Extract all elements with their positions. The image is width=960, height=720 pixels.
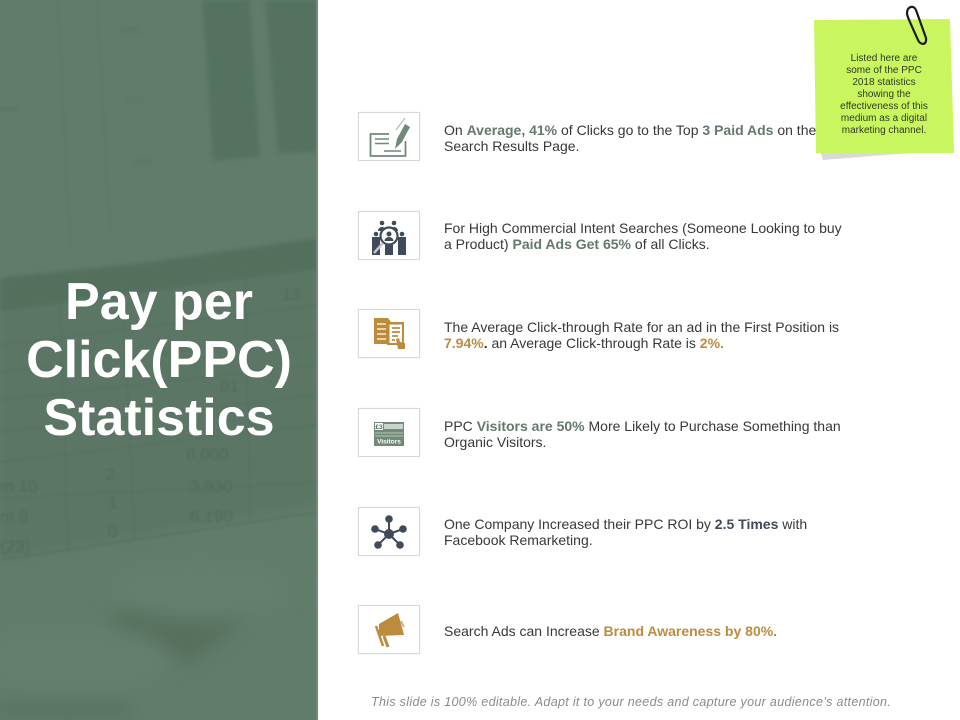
panel: photo background: [0, 0, 318, 720]
panel: photo background: 13: [282, 285, 301, 304]
title: Statistics: [43, 389, 275, 447]
text: facebook remarketing: [444, 516, 807, 548]
icon: check and pen: [358, 112, 420, 161]
note paper: [814, 19, 954, 153]
icon: visitors card: £3: [375, 424, 383, 431]
text: brand awareness: Search Ads can Increase Brand Awareness by 80%.: [444, 623, 777, 639]
text: click-through rate: [444, 319, 839, 351]
text: visitors likely to purchase: PPC Visitors are 50% More Likely to Purchase Something than: [444, 418, 841, 434]
text: clicks on top ads: On Average, 41% of Clicks go to the Top 3 Paid Ads on the: [444, 122, 816, 138]
title: [26, 273, 292, 447]
text: visitors likely to purchase: [444, 418, 841, 450]
title: Click(PPC): [26, 331, 292, 389]
panel: photo background: 6,000: [186, 445, 229, 464]
sticky note: [814, 6, 954, 160]
text: clicks on top ads: Search Results Page.: [444, 138, 579, 154]
panel: photo background: 1: [108, 493, 117, 512]
text: visitors likely to purchase: Organic Visitors.: [444, 434, 546, 450]
panel: photo background: hart: [0, 104, 17, 115]
icon: document with hand: [358, 309, 420, 358]
text: click-through rate: The Average Click-through Rate for an ad in the First Position is: [444, 319, 839, 335]
title: Pay per: [65, 273, 253, 331]
panel: photo background: 6,190: [190, 507, 233, 526]
note shadow: [821, 153, 908, 160]
icon: people and magnifier: [358, 211, 420, 260]
note text: effectiveness of this: [840, 101, 928, 112]
panel: photo background: m 9: [0, 507, 28, 526]
note text: medium as a digital: [841, 113, 927, 124]
note text: Listed here are: [851, 53, 917, 64]
panel: photo background: 6/05: [120, 26, 140, 37]
text: commercial intent: [444, 220, 842, 252]
note text: marketing channel.: [842, 125, 926, 136]
icon: visitors card: [358, 408, 420, 457]
panel: photo background: 01: [220, 377, 239, 396]
note text: [840, 53, 928, 136]
text: facebook remarketing: One Company Increased their PPC ROI by 2.5 Times with: [444, 516, 807, 532]
panel: photo background: 4/05: [132, 158, 152, 169]
panel: photo background: 3,930: [190, 477, 233, 496]
panel: photo background: 0: [108, 522, 117, 541]
icon: paperclip: [906, 6, 928, 45]
icon: megaphone: [358, 605, 420, 654]
panel: photo background: 5/05: [125, 96, 145, 107]
text: facebook remarketing: Facebook Remarketing.: [444, 532, 593, 548]
text: clicks on top ads: [444, 122, 816, 154]
footer note: This slide is 100% editable. Adapt it to your needs and capture your audience’s attention.: [371, 695, 891, 709]
text: click-through rate: 7.94%. an Average Click-through Rate is 2%.: [444, 335, 724, 351]
note text: some of the PPC: [846, 65, 922, 76]
icon: network hub: [358, 507, 420, 556]
panel: photo background: (23): [0, 537, 30, 556]
note text: 2018 statistics: [852, 77, 916, 88]
note text: showing the: [857, 89, 911, 100]
panel: photo background: 2: [105, 465, 114, 484]
panel: photo background: m 10: [0, 477, 38, 496]
text: commercial intent: a Product) Paid Ads Get 65% of all Clicks.: [444, 236, 710, 252]
icon: visitors card: Visitors: [377, 438, 401, 446]
text: commercial intent: For High Commercial Intent Searches (Someone Looking to buy: [444, 220, 842, 236]
